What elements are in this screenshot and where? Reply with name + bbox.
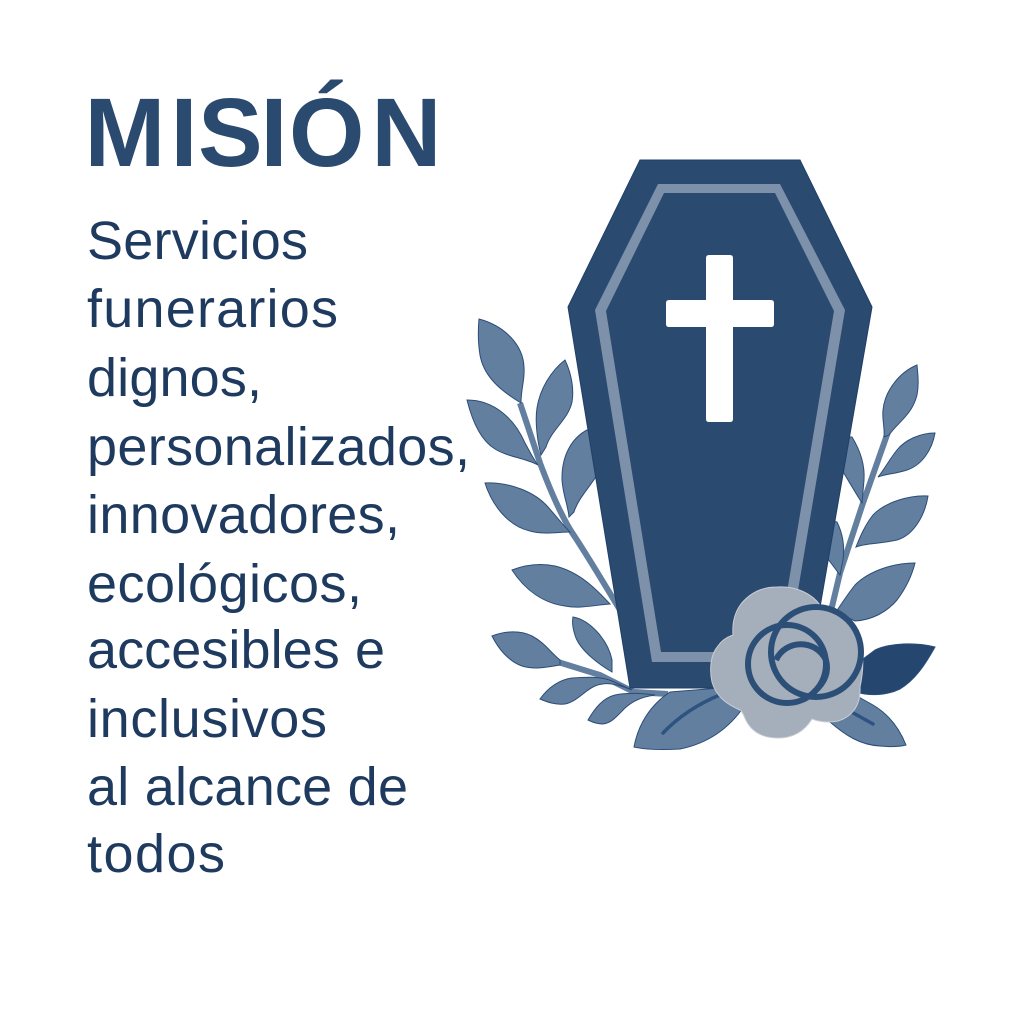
text block: mission statement: ecológicos,: [87, 554, 362, 614]
text block: mission statement: Servicios: [87, 211, 308, 271]
icon: lower left sprig: [492, 617, 668, 724]
icon: right laurel branch: [825, 365, 935, 621]
text block: mission statement: innovadores,: [87, 485, 400, 545]
text block: mission statement: accesibles e: [87, 620, 385, 680]
icon: left laurel branch: [467, 319, 620, 610]
coffin inner band: [595, 184, 845, 662]
title: MISIÓN: [84, 78, 441, 187]
icon: rose: [711, 587, 863, 738]
text block: mission statement: personalizados,: [87, 417, 470, 477]
text block: mission statement: [87, 211, 470, 884]
text block: mission statement: al alcance de: [87, 757, 408, 817]
icon: bottom leaves: [634, 644, 935, 750]
text block: mission statement: funerarios: [87, 279, 338, 339]
rose rings: [748, 607, 861, 703]
text block: mission statement: dignos,: [87, 348, 262, 408]
text block: mission statement: inclusivos: [87, 689, 327, 749]
icon: cross: [666, 255, 774, 422]
icon: coffin: [568, 160, 872, 688]
text block: mission statement: todos: [87, 824, 225, 884]
